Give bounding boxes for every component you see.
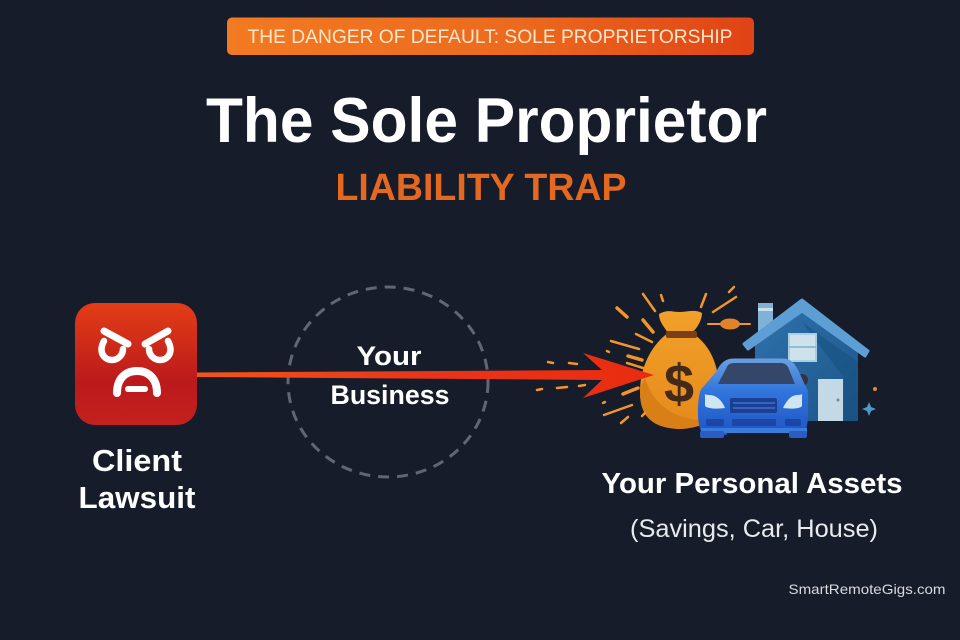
subtitle: LIABILITY TRAP: [336, 167, 626, 209]
icon: angry client lawsuit face: [75, 303, 197, 425]
arrow: [197, 353, 654, 398]
label: your business: Business: [330, 380, 450, 410]
icon: spark blob right of bag: [720, 318, 740, 330]
your business dashed circle: [288, 287, 488, 477]
top banner: [227, 18, 754, 55]
label: your business: Your: [356, 341, 422, 371]
watermark: SmartRemoteGigs.com: [788, 581, 946, 597]
icon: small sparkles: [862, 387, 877, 416]
icon: impact sparks: [537, 287, 750, 423]
icon: money bag: [640, 311, 719, 429]
label: client lawsuit: Lawsuit: [78, 480, 196, 515]
icon: car: [698, 358, 808, 438]
top banner: THE DANGER OF DEFAULT: SOLE PROPRIETORSHIP: [248, 26, 732, 48]
title: The Sole Proprietor: [206, 86, 767, 156]
label: client lawsuit: [78, 443, 196, 515]
icon: money bag: $: [664, 354, 694, 414]
label: your business: [330, 341, 450, 410]
label: savings car house: (Savings, Car, House): [630, 515, 878, 543]
label: your personal assets: Your Personal Assets: [602, 468, 902, 500]
icon: house: [744, 300, 868, 421]
label: client lawsuit: Client: [92, 443, 182, 478]
